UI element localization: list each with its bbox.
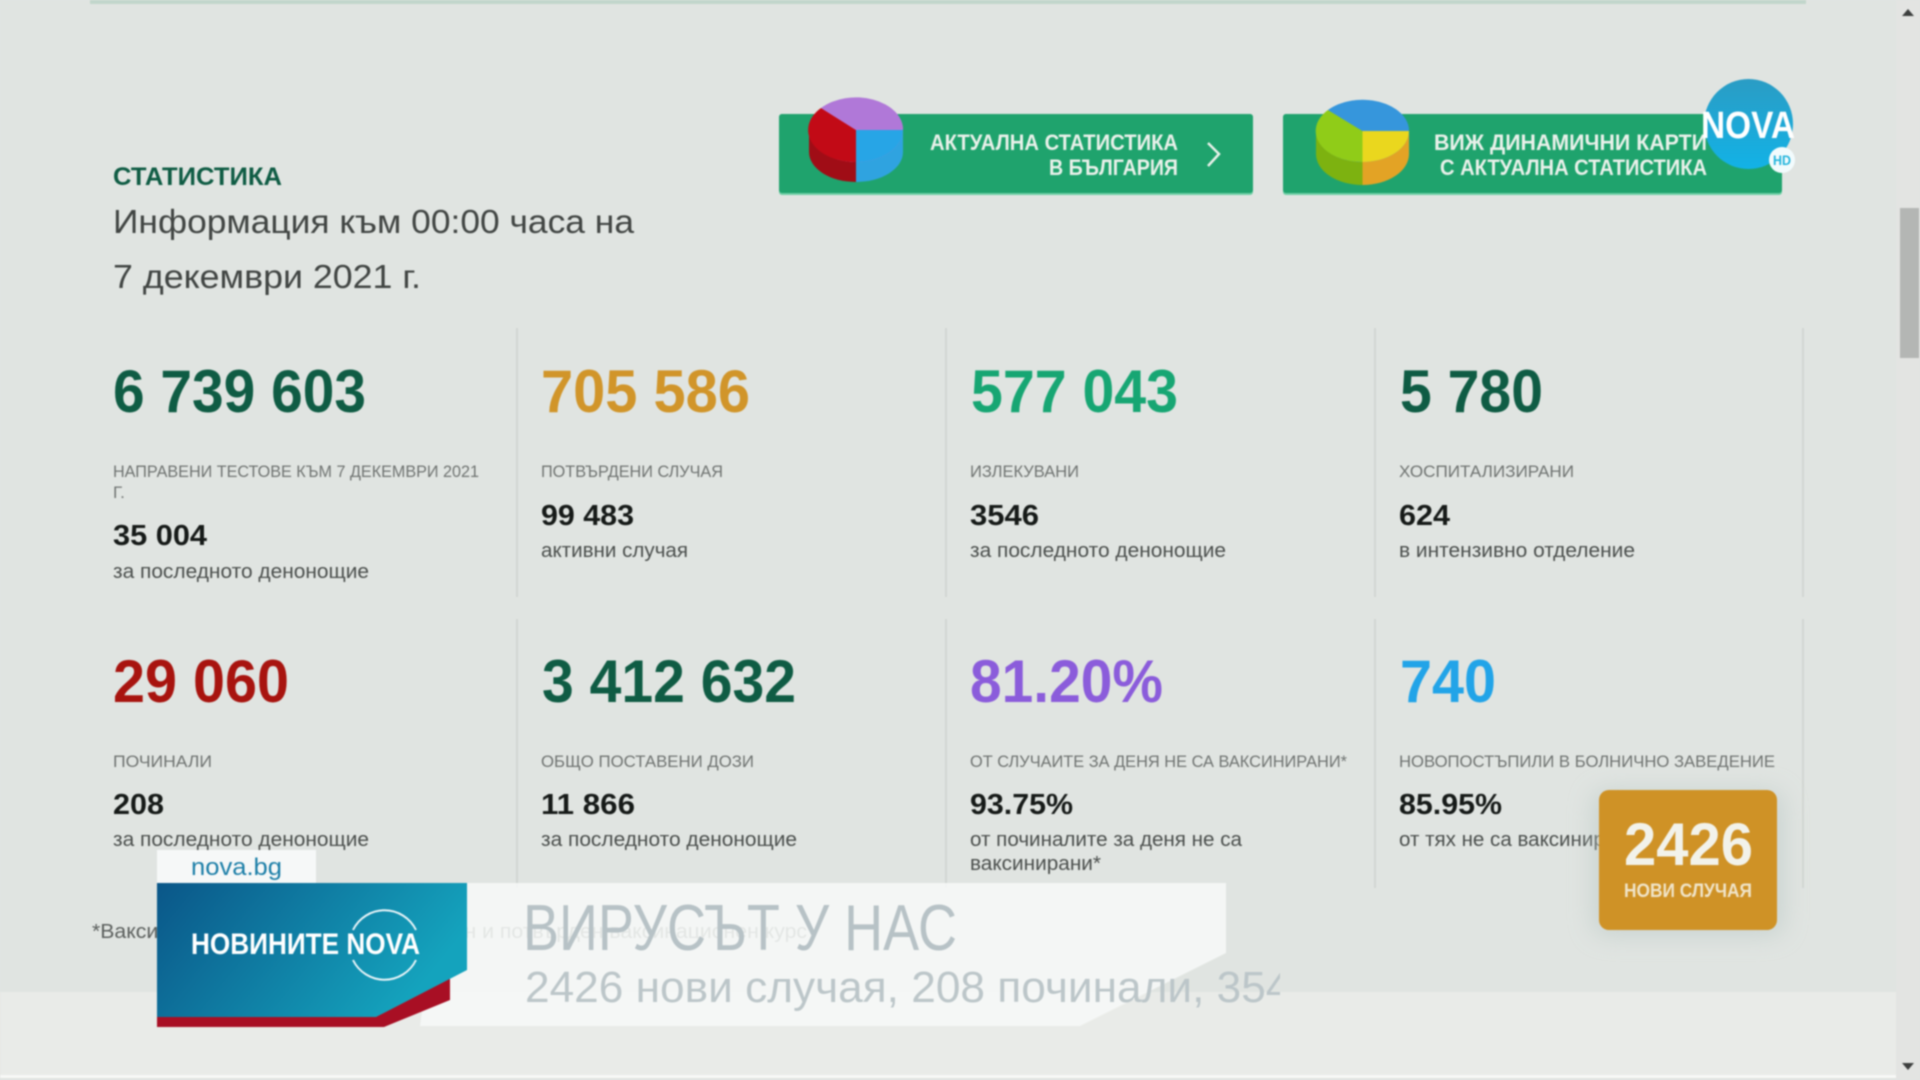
panel: recovered: ИЗЛЕКУВАНИ	[970, 462, 1079, 481]
panel: unvaccinated cases	[970, 648, 1347, 875]
panel: deaths: 29 060	[113, 648, 289, 715]
panel: unvaccinated cases: 93.75%	[970, 789, 1073, 821]
panel: confirmed cases: 99 483	[541, 500, 634, 532]
panel: unvaccinated cases: ОТ СЛУЧАИТЕ ЗА ДЕНЯ НЕ СА ВАКСИНИРАНИ*	[970, 752, 1347, 771]
icon: pie chart green yellow blue	[1316, 100, 1409, 185]
panel: hospitalized	[1399, 358, 1635, 562]
text block: date information	[113, 203, 635, 295]
panel: hospitalized: 624	[1399, 500, 1450, 532]
panel: recovered: 577 043	[971, 358, 1178, 425]
button label: В БЪЛГАРИЯ	[1049, 155, 1178, 180]
scrollbar	[1896, 0, 1920, 1080]
panel: tests: за последното денонощие	[113, 561, 369, 583]
callout: new cases	[1592, 790, 1784, 936]
panel: unvaccinated cases: ваксинирани*	[970, 853, 1101, 875]
panel: deaths	[113, 648, 369, 851]
logo: NOVA HD: NOVA	[1701, 105, 1795, 147]
site tag: nova.bg: nova.bg	[191, 854, 282, 881]
button label: ВИЖ ДИНАМИЧНИ КАРТИ	[1434, 130, 1707, 155]
logo: НОВИНИТЕ NOVA: НОВИНИТЕ NOVA	[191, 928, 420, 961]
panel: confirmed cases: ПОТВЪРДЕНИ СЛУЧАЯ	[541, 462, 723, 481]
panel: total doses: 3 412 632	[542, 648, 796, 715]
panel: unvaccinated cases: 81.20%	[970, 648, 1163, 715]
icon: pie chart red blue purple	[808, 97, 903, 182]
panel: confirmed cases	[541, 358, 750, 562]
text block: date information: Информация към 00:00 часа на	[113, 203, 635, 240]
logo: НОВИНИТЕ NOVA	[157, 883, 467, 1027]
panel: newly hospitalized: от тях не са ваксинирани	[1399, 829, 1639, 851]
site tag: nova.bg	[157, 850, 316, 883]
panel: deaths: за последното денонощие	[113, 829, 369, 851]
heading: статистика: СТАТИСТИКА	[113, 163, 282, 191]
panel: tests: 6 739 603	[113, 358, 366, 425]
panel: newly hospitalized: 85.95%	[1399, 789, 1502, 821]
panel: confirmed cases: активни случая	[541, 540, 688, 562]
panel: hospitalized: ХОСПИТАЛИЗИРАНИ	[1399, 462, 1574, 481]
panel: tests	[113, 358, 479, 583]
footnote: *Ваксинирани са лицата със завършен и потвърден ваксинационен курс	[92, 921, 807, 943]
button: current statistics in Bulgaria	[779, 97, 1253, 195]
logo: NOVA HD: HD	[1773, 152, 1791, 168]
icon: chevron arrow	[1208, 143, 1219, 166]
button label: С АКТУАЛНА СТАТИСТИКА	[1440, 155, 1707, 180]
panel: tests: Г.	[113, 483, 125, 502]
lower third: news banner	[157, 850, 1315, 1027]
panel: tests: 35 004	[113, 520, 207, 552]
panel: recovered: 3546	[970, 500, 1039, 532]
callout: new cases: 2426	[1624, 811, 1753, 878]
panel: tests: НАПРАВЕНИ ТЕСТОВЕ КЪМ 7 ДЕКЕМВРИ 2021	[113, 462, 479, 481]
panel: total doses	[541, 648, 797, 851]
banner subtitle: 2426 нови случая, 208 починали, 3546	[525, 963, 1315, 1012]
banner headline: ВИРУСЪТ У НАС	[523, 891, 957, 964]
panel: deaths: 208	[113, 789, 164, 821]
logo: NOVA HD	[1701, 79, 1795, 173]
panel: confirmed cases: 705 586	[541, 358, 750, 425]
button: dynamic maps with statistics	[1283, 100, 1782, 195]
button label: АКТУАЛНА СТАТИСТИКА	[930, 130, 1178, 155]
panel: newly hospitalized: НОВОПОСТЪПИЛИ В БОЛНИЧНО ЗАВЕДЕНИЕ	[1399, 752, 1775, 771]
button label	[930, 130, 1178, 180]
panel: unvaccinated cases: от починалите за деня не са	[970, 829, 1243, 851]
panel: total doses: за последното денонощие	[541, 829, 797, 851]
button label	[1434, 130, 1707, 180]
panel: newly hospitalized	[1399, 648, 1775, 851]
callout: new cases: НОВИ СЛУЧАЯ	[1624, 881, 1752, 902]
panel: total doses: ОБЩО ПОСТАВЕНИ ДОЗИ	[541, 752, 754, 771]
text block: date information: 7 декември 2021 г.	[113, 258, 421, 295]
panel: deaths: ПОЧИНАЛИ	[113, 752, 212, 771]
panel: newly hospitalized: 740	[1400, 648, 1496, 715]
panel: recovered: за последното денонощие	[970, 540, 1226, 562]
panel: recovered	[970, 358, 1226, 562]
panel: hospitalized: 5 780	[1400, 358, 1543, 425]
panel: total doses: 11 866	[541, 789, 635, 821]
panel: hospitalized: в интензивно отделение	[1399, 540, 1635, 562]
dividers	[516, 328, 1804, 888]
